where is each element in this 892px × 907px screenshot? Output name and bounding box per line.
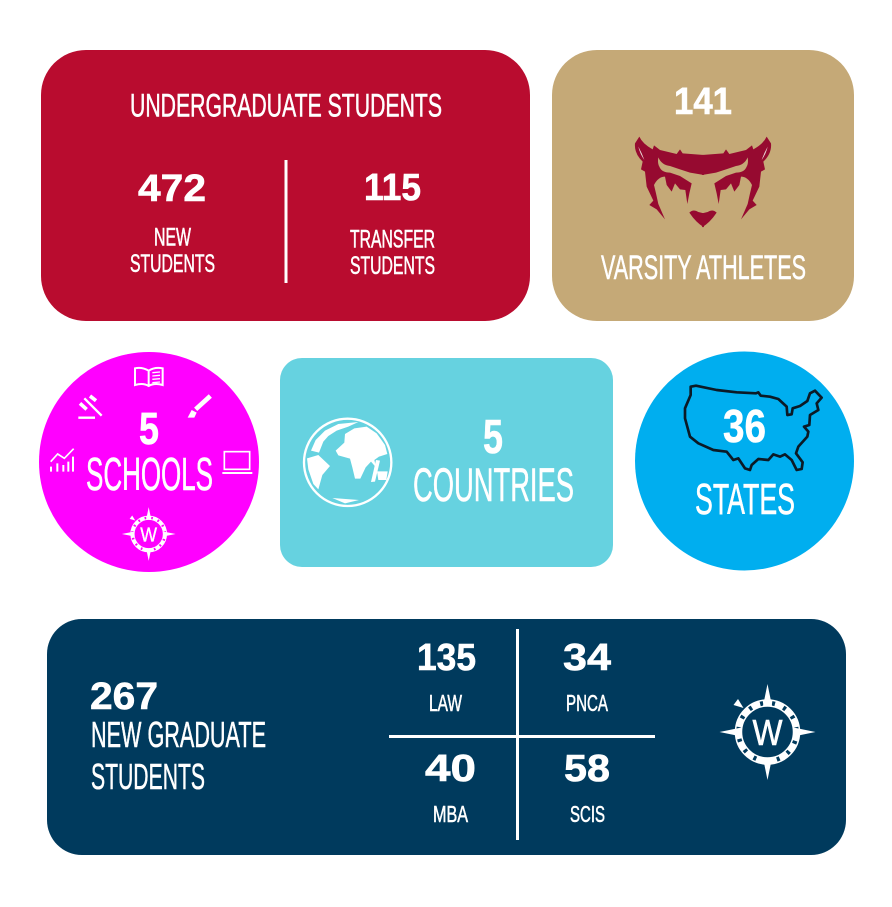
stat: 135 law: LAW	[429, 690, 462, 716]
stat: 40 mba: MBA	[433, 801, 468, 827]
icon: compass: W	[752, 712, 783, 753]
stat: 472 new students: STUDENTS	[130, 250, 215, 278]
icon: globe	[304, 419, 391, 506]
stat: 58 scis	[564, 748, 610, 827]
panel: countries	[280, 358, 613, 567]
icon: compass small	[122, 507, 176, 561]
stat: 141: 141	[674, 81, 732, 123]
label: countries: COUNTRIES	[413, 458, 574, 511]
icon: usa outline	[685, 386, 822, 470]
stat: 135 law	[417, 637, 476, 716]
icon: compass	[720, 684, 816, 780]
stat: 115 transfer students	[350, 167, 435, 280]
stat: 58 scis: SCIS	[570, 801, 605, 827]
icon: paintbrush	[188, 396, 210, 418]
stat: 267 new graduate students: 267	[90, 676, 158, 718]
panel: new graduate students	[47, 619, 846, 855]
panel: states circle	[635, 352, 854, 570]
stat: 472 new students	[130, 168, 215, 278]
stat: 5: 5	[483, 411, 503, 464]
stat: 36: 36	[723, 400, 766, 452]
label: states: STATES	[695, 475, 795, 524]
panel: schools circle	[39, 352, 259, 572]
stat: 5: 5	[139, 403, 159, 454]
icon: gavel	[78, 396, 102, 418]
icon: book	[135, 368, 163, 386]
stat: 115 transfer students: 115	[364, 167, 421, 209]
label: schools: SCHOOLS	[86, 448, 213, 500]
stat: 40 mba: 40	[425, 748, 476, 790]
panel: varsity athletes	[552, 50, 854, 321]
stat: 34 pnca	[563, 637, 611, 716]
stat: 34 pnca: 34	[563, 637, 611, 679]
stat: 267 new graduate students: STUDENTS	[91, 756, 205, 797]
icon: compass small: W	[140, 524, 157, 546]
stat: 115 transfer students: TRANSFER	[350, 226, 435, 254]
icons: schools	[51, 368, 252, 473]
stat: 135 law: 135	[417, 637, 476, 679]
stat: 472 new students: 472	[138, 168, 206, 210]
stat: 34 pnca: PNCA	[566, 690, 608, 716]
stat: 40 mba	[425, 748, 476, 827]
stat: 472 new students: NEW	[154, 224, 191, 252]
icon: wildcat mascot	[635, 137, 771, 227]
heading: undergraduate students: UNDERGRADUATE STUDENTS	[130, 88, 442, 124]
stat: 267 new graduate students: NEW GRADUATE	[91, 714, 266, 755]
icon: laptop	[222, 452, 252, 473]
icon: chart	[51, 449, 74, 472]
stat: 115 transfer students: STUDENTS	[350, 252, 435, 280]
panel: undergraduate students	[41, 50, 530, 321]
stat: 267 new graduate students	[90, 676, 266, 797]
stat: 58 scis: 58	[564, 748, 610, 790]
